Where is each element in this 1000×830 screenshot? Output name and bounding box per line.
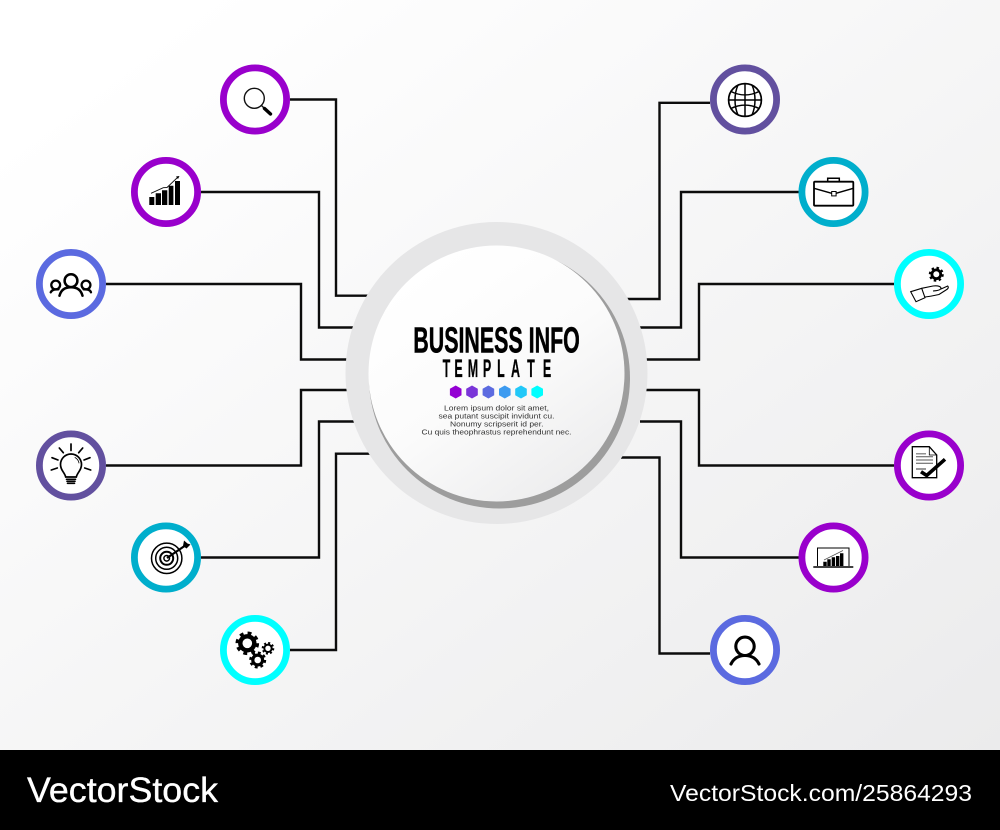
- body text: [422, 404, 572, 436]
- node: target: [134, 526, 198, 589]
- subtitle: P: [483, 356, 491, 384]
- body text: Lorem ipsum dolor sit amet,: [444, 404, 549, 412]
- node: light bulb: [39, 434, 103, 497]
- footer logo: VectorStock: [27, 771, 219, 810]
- subtitle: E: [454, 356, 463, 384]
- body text: sea putant suscipit invidunt cu.: [438, 412, 554, 420]
- subtitle: L: [497, 356, 505, 384]
- body text: Nonumy scripserit id per.: [450, 420, 544, 428]
- node: hand with gear: [897, 252, 961, 316]
- title: BUSINESS INFO: [413, 320, 580, 361]
- footer url: VectorStock.com/25864293: [670, 780, 972, 806]
- node: document check: [897, 434, 961, 497]
- connector lines: [106, 100, 894, 654]
- subtitle: E: [543, 356, 551, 384]
- body text: Cu quis theophrastus reprehendunt nec.: [422, 428, 572, 436]
- central disc: [346, 222, 648, 524]
- node: globe: [713, 68, 777, 131]
- node: laptop chart: [802, 526, 865, 589]
- subtitle: A: [511, 356, 520, 384]
- node: team: [39, 252, 103, 316]
- node: search: [223, 68, 287, 131]
- subtitle: T: [443, 356, 450, 384]
- node: gears: [223, 618, 287, 682]
- subtitle: M: [468, 356, 478, 384]
- node: growth chart: [134, 160, 198, 224]
- subtitle: T: [527, 356, 535, 384]
- node: user: [713, 618, 777, 682]
- footer band: [0, 750, 1000, 830]
- node: briefcase: [802, 160, 865, 224]
- hexagon row: [450, 386, 543, 398]
